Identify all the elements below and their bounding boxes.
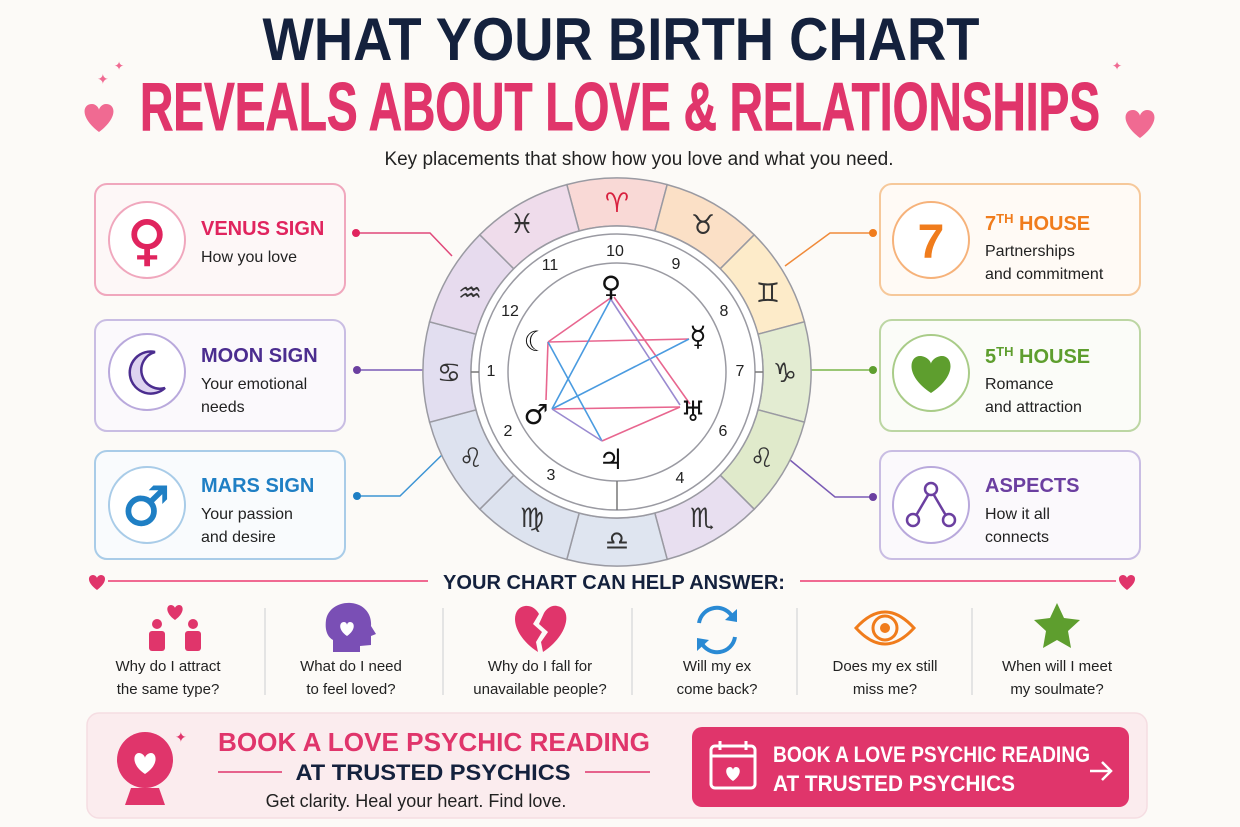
bottom banner: BOOK A LOVE PSYCHIC READING <box>218 727 650 757</box>
question: unavailable <box>473 606 607 698</box>
house numbers: 7 <box>736 363 745 380</box>
panel: 5th house: 5 <box>985 346 996 368</box>
subtitle: Key placements that show how you love and what you need. <box>384 149 894 170</box>
planets: ♂︎ <box>523 398 549 431</box>
decorative hearts: ✦ <box>114 59 124 73</box>
panel: 5th house: and attraction <box>985 399 1082 416</box>
panel: venus sign: VENUS SIGN <box>201 218 324 240</box>
button: book reading: AT TRUSTED PSYCHICS <box>773 771 1015 796</box>
question: unavailable: unavailable people? <box>473 681 607 698</box>
zodiac glyphs: ♓︎ <box>510 209 534 240</box>
question: ex come back: come back? <box>677 681 757 698</box>
bottom banner: Get clarity. Heal your heart. Find love. <box>266 791 566 811</box>
question: same type: the same type? <box>117 681 219 698</box>
question: unavailable: Why do I fall for <box>488 658 592 675</box>
questions row <box>115 603 1113 698</box>
question: same type <box>115 605 221 698</box>
house numbers: 6 <box>719 423 728 440</box>
zodiac glyphs: ♋︎ <box>437 358 461 389</box>
connectors <box>356 233 873 497</box>
heading: your chart can help answer <box>89 572 1135 594</box>
house numbers: 9 <box>672 256 681 273</box>
question: soulmate <box>1002 603 1113 698</box>
planets: ♀︎ <box>601 270 621 303</box>
panel: moon sign <box>95 320 345 431</box>
question: ex come back: Will my ex <box>683 658 752 675</box>
panel: mars sign: Your passion <box>201 506 293 523</box>
zodiac glyphs: ♒︎ <box>458 278 482 309</box>
button: book reading <box>692 727 1129 807</box>
zodiac glyphs: ♉︎ <box>691 210 715 241</box>
panel: aspects: ASPECTS <box>985 475 1079 497</box>
panel: 7th house <box>880 184 1140 295</box>
zodiac glyphs: ♌︎ <box>750 443 774 474</box>
panel: mars sign: ♂︎ <box>122 475 170 538</box>
title <box>140 6 1100 145</box>
question: feel loved <box>300 603 402 698</box>
aspect lines <box>546 297 690 441</box>
panel: aspects: connects <box>985 529 1049 546</box>
panel: aspects: How it all <box>985 506 1050 523</box>
decorative hearts: ✦ <box>1112 59 1122 73</box>
house numbers: 1 <box>487 363 496 380</box>
question: same type: Why do I attract <box>115 658 221 675</box>
planets <box>523 270 707 476</box>
zodiac glyphs: ♌︎ <box>459 443 483 474</box>
panel: moon sign: Your emotional <box>201 376 307 393</box>
question: miss me: Does my ex still <box>832 658 938 675</box>
zodiac glyphs: ♎︎ <box>605 526 629 557</box>
question: soulmate: When will I meet <box>1002 658 1113 675</box>
zodiac glyphs: ♏︎ <box>690 503 714 534</box>
panel: moon sign: MOON SIGN <box>201 345 318 367</box>
zodiac glyphs <box>437 188 797 557</box>
house numbers: 8 <box>720 303 729 320</box>
question: miss me: miss me? <box>853 681 917 698</box>
question: miss me <box>832 612 938 698</box>
question: ex come back <box>677 608 757 698</box>
panel: 7th house: TH <box>996 211 1013 226</box>
button: book reading: BOOK A LOVE PSYCHIC READING <box>773 742 1090 767</box>
panel: venus sign: How you love <box>201 249 297 266</box>
panel: 5th house <box>880 320 1140 431</box>
title: WHAT YOUR BIRTH CHART <box>262 6 980 73</box>
zodiac glyphs: ♍︎ <box>520 503 544 534</box>
planets: ♅︎ <box>680 395 706 428</box>
zodiac glyphs: ♊︎ <box>756 278 780 309</box>
planets: ♃︎ <box>598 443 624 476</box>
decorative hearts <box>85 59 1154 138</box>
house numbers: 3 <box>547 467 556 484</box>
panel: aspects <box>880 451 1140 559</box>
panel: moon sign: needs <box>201 399 245 416</box>
zodiac glyphs: ♈︎ <box>605 188 629 219</box>
house numbers: 12 <box>501 303 519 320</box>
question: feel loved: to feel loved? <box>306 681 396 698</box>
house numbers: 10 <box>606 243 624 260</box>
house numbers: 4 <box>676 470 685 487</box>
bottom banner <box>87 713 1147 818</box>
panel: mars sign: MARS SIGN <box>201 475 314 497</box>
house numbers: 11 <box>542 257 558 274</box>
zodiac glyphs: ♑︎ <box>773 358 797 389</box>
heading: your chart can help answer: YOUR CHART CAN HELP ANSWER: <box>443 572 785 594</box>
icon: crystal ball <box>117 729 187 805</box>
panel: 5th house: Romance <box>985 376 1054 393</box>
panel: 7th house: 7 <box>985 213 996 235</box>
planets: ☾︎ <box>523 325 549 358</box>
panel: 5th house: HOUSE <box>1013 346 1090 368</box>
chart: birth chart wheel <box>423 178 811 566</box>
house numbers <box>487 243 745 487</box>
panel: 5th house: TH <box>996 344 1013 359</box>
panel: mars sign <box>95 451 345 559</box>
question: feel loved: What do I need <box>300 658 402 675</box>
panel: mars sign: and desire <box>201 529 276 546</box>
decorative hearts: ✦ <box>97 71 109 87</box>
bottom banner: AT TRUSTED PSYCHICS <box>296 760 570 785</box>
house numbers: 2 <box>504 423 513 440</box>
question: soulmate: my soulmate? <box>1010 681 1104 698</box>
panel: 7th house: HOUSE <box>1013 213 1090 235</box>
panel: venus sign <box>95 184 345 295</box>
planets: ☿︎ <box>689 320 707 353</box>
panel: venus sign: ♀︎ <box>127 209 167 272</box>
icon: crystal ball: ✦ <box>175 729 187 745</box>
panel: 7th house: and commitment <box>985 266 1104 283</box>
panel: 7th house: 7 <box>918 216 944 269</box>
panel: 7th house: Partnerships <box>985 243 1075 260</box>
